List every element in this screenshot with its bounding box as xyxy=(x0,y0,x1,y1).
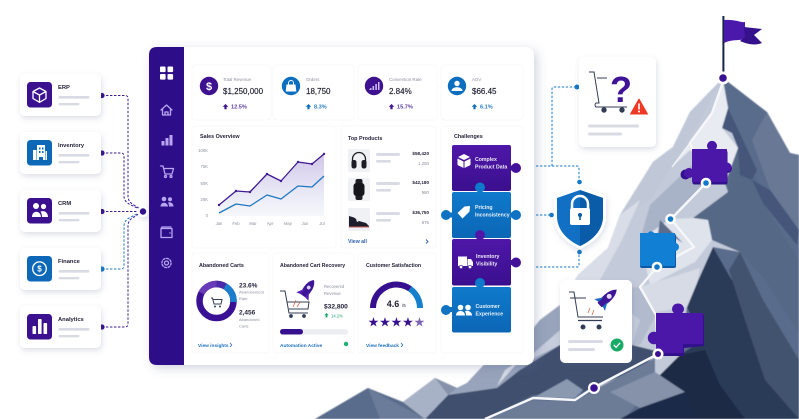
panel: sales overview: 50K xyxy=(201,181,208,186)
source card: Analytics: Analytics xyxy=(58,317,84,323)
panel: abandoned cart recovery: $32,800 xyxy=(324,304,348,310)
product: watch: $42,180 xyxy=(412,180,429,185)
KPI: conversion rate: 2.84% xyxy=(389,87,412,96)
sidebar xyxy=(149,47,184,365)
connectors from challenges to shield xyxy=(536,84,582,267)
connectors from sources to hub xyxy=(99,93,143,330)
panel: sales overview: Jan xyxy=(216,221,223,226)
icon: box xyxy=(27,82,52,108)
panel: sales overview: Jul xyxy=(319,221,325,226)
panel: sales overview: Sales Overview xyxy=(200,134,240,140)
panel: abandoned carts: Carts xyxy=(239,324,249,328)
product: watch: 980 xyxy=(422,190,430,195)
puzzle piece: blue xyxy=(640,231,679,268)
panel: sales overview: 100K xyxy=(198,148,208,153)
panel: abandoned carts: Abandoned xyxy=(239,317,259,322)
panel: top products xyxy=(341,126,436,248)
panel: dashboard xyxy=(149,47,534,365)
product: sneaker: 875 xyxy=(422,220,430,225)
KPI: AOV: 6.1% xyxy=(480,104,493,110)
panel: sales overview: 75K xyxy=(201,164,208,169)
gauge xyxy=(373,285,420,309)
panel: abandoned cart recovery: Revenue xyxy=(324,291,341,296)
star rating: ★ xyxy=(368,314,379,330)
panel: sales overview: Apr xyxy=(267,221,274,226)
star rating: ★ xyxy=(414,314,425,330)
panel: abandoned carts: Rate xyxy=(239,296,248,301)
mountain xyxy=(315,78,799,419)
KPI: total revenue: $ xyxy=(206,81,212,93)
panel: sales overview: Mar xyxy=(249,221,257,226)
puzzle: pricing inconsistency: Inconsistency xyxy=(475,212,510,218)
icon: cart with rocket xyxy=(280,276,320,318)
product: sneaker: $36,750 xyxy=(412,210,429,215)
panel: abandoned carts: Abandonment xyxy=(239,290,265,294)
gauge: /5 xyxy=(402,303,406,308)
source card: Inventory: Inventory xyxy=(58,143,85,149)
panel: abandoned carts: Abandoned Carts xyxy=(199,263,244,269)
card: cart success xyxy=(560,280,632,363)
KPI: total revenue xyxy=(192,65,271,120)
panel: sales overview: 0 xyxy=(206,213,209,218)
KPI: total revenue: 12.5% xyxy=(231,104,247,110)
panel: abandoned cart recovery: Abandoned Cart Recovery xyxy=(280,263,345,269)
progress bar xyxy=(280,329,348,334)
waypoint: base xyxy=(588,382,600,394)
panel: abandoned cart recovery: Automation Active xyxy=(280,343,323,349)
source card: ERP: ERP xyxy=(58,85,70,91)
puzzle: customer experience: Customer xyxy=(476,304,500,310)
KPI: conversion rate: Conversion Rate xyxy=(389,77,422,82)
icon: dollar coin: $ xyxy=(37,264,42,274)
source card: ERP xyxy=(20,74,101,116)
star rating: ★ xyxy=(391,314,402,330)
puzzle: pricing inconsistency: Pricing xyxy=(475,205,493,211)
source card: Analytics xyxy=(20,306,101,348)
waypoint: blue piece xyxy=(652,262,662,272)
puzzle: complex product data: Product Data xyxy=(475,164,507,170)
panel: sales overview: 25K xyxy=(201,197,208,202)
panel: abandoned cart recovery: Recovered xyxy=(324,284,345,289)
hub node xyxy=(137,206,149,217)
puzzle piece: bottom purple xyxy=(648,304,704,356)
star rating xyxy=(368,314,425,330)
icon: bars xyxy=(27,314,52,340)
flag xyxy=(722,16,762,74)
panel: customer satisfaction xyxy=(358,253,436,353)
panel: abandoned carts: 2,456 xyxy=(239,310,256,316)
KPI: AOV: $66.45 xyxy=(472,87,497,96)
panel: customer satisfaction: Customer Satisfaction xyxy=(366,263,421,269)
panel: sales overview: Jun xyxy=(302,221,309,226)
puzzle: complex product data: Complex xyxy=(475,157,497,163)
panel: abandoned cart recovery xyxy=(273,253,354,353)
panel: abandoned carts: View insights xyxy=(198,343,229,349)
product: watch xyxy=(348,178,430,201)
source card: CRM: CRM xyxy=(58,201,71,207)
panel: customer satisfaction: View feedback xyxy=(366,343,399,349)
panel: challenges xyxy=(441,126,523,353)
puzzle piece: top purple xyxy=(680,141,732,184)
star rating: ★ xyxy=(402,314,414,330)
waypoint: upper blue xyxy=(701,178,711,188)
puzzle: inventory visibility xyxy=(452,230,521,286)
panel: sales overview: Feb xyxy=(232,221,240,226)
puzzle: customer experience xyxy=(441,278,511,332)
source card: Finance: Finance xyxy=(58,259,81,265)
KPI: conversion rate xyxy=(358,65,437,120)
panel: challenges: Challenges xyxy=(454,134,483,140)
KPI: orders: 8.3% xyxy=(314,104,327,110)
KPI: orders: Orders xyxy=(306,77,320,82)
card: cart problem: ? xyxy=(610,69,632,110)
puzzle: customer experience: Experience xyxy=(476,312,503,318)
KPI: total revenue: $1,250,000 xyxy=(223,87,264,96)
climbing path xyxy=(485,82,723,419)
KPI: AOV xyxy=(441,65,523,120)
source card: Inventory xyxy=(20,132,101,174)
puzzle: inventory visibility: Inventory xyxy=(476,254,499,260)
puzzle: complex product data xyxy=(452,145,521,191)
panel: top products: Top Products xyxy=(348,136,382,142)
panel: top products: View all xyxy=(348,239,367,245)
panel: abandoned cart recovery: 14.2% xyxy=(331,314,343,318)
star rating: ★ xyxy=(379,314,391,330)
icon: security shield xyxy=(554,187,606,249)
product: headphones: $58,420 xyxy=(412,151,429,156)
KPI: conversion rate: 15.7% xyxy=(397,104,413,110)
product: headphones: 1,250 xyxy=(418,161,430,166)
KPI: AOV: AOV xyxy=(472,77,481,82)
donut chart xyxy=(200,284,234,318)
panel: sales overview: May xyxy=(284,221,293,226)
icon: building xyxy=(27,140,52,166)
waypoint: summit xyxy=(716,72,730,84)
panel: abandoned carts: 23.6% xyxy=(239,282,258,290)
gauge: 4.6 xyxy=(387,299,399,309)
KPI: orders xyxy=(273,65,354,120)
waypoint: lower purple xyxy=(652,348,664,360)
puzzle: pricing inconsistency xyxy=(441,182,521,238)
card: cart problem xyxy=(579,57,656,147)
waypoint: ridge blue xyxy=(665,214,676,224)
panel: abandoned carts xyxy=(192,253,270,353)
panel: sales overview xyxy=(192,126,336,248)
puzzle: inventory visibility: Visibility xyxy=(476,262,497,268)
source card: Finance xyxy=(20,248,101,290)
icon: people xyxy=(27,198,52,224)
source card: CRM xyxy=(20,190,101,232)
KPI: total revenue: Total Revenue xyxy=(223,77,252,82)
KPI: orders: 18,750 xyxy=(306,87,331,96)
product: headphones xyxy=(348,149,430,172)
product: sneaker xyxy=(348,208,430,231)
